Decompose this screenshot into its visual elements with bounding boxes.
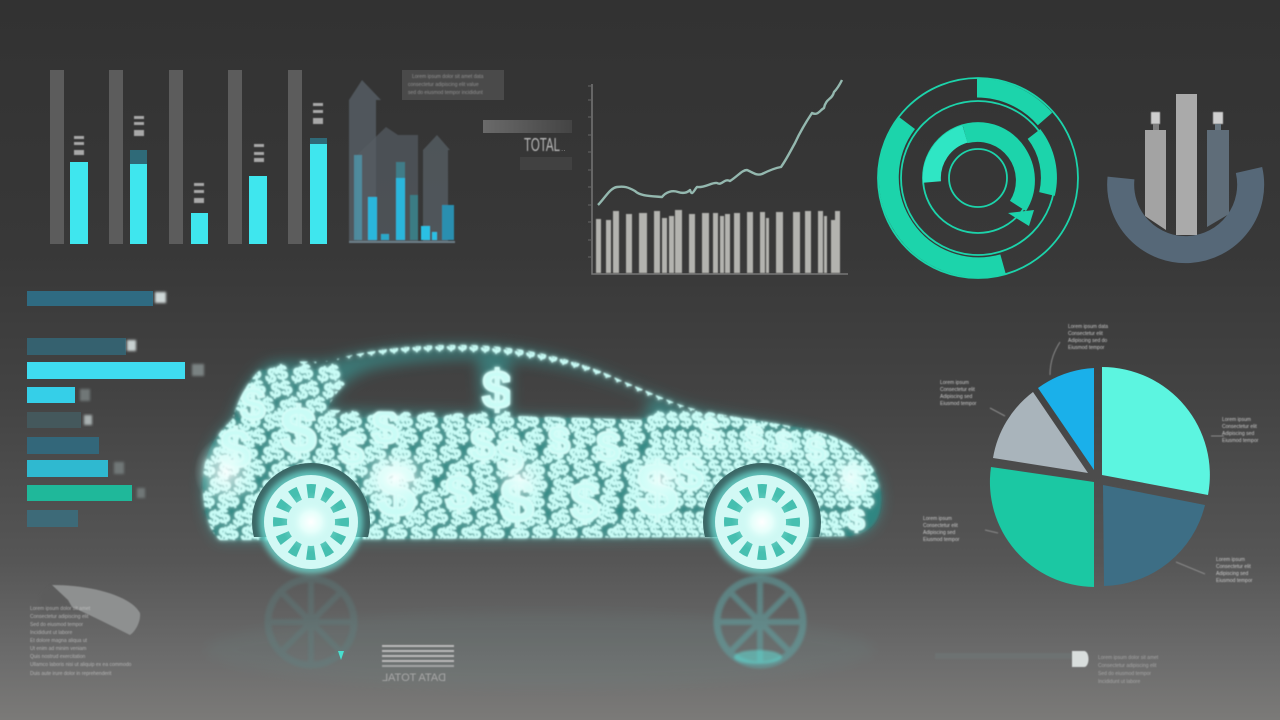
pie labels: Consectetur elit xyxy=(1068,331,1103,337)
car made of dollar signs: $ xyxy=(220,417,251,480)
pie labels: Adipiscing sed xyxy=(923,530,955,536)
car made of dollar signs: $$$$$$$$$$$$$$$$$$$$$$$$$$$$$$$$$$$$$$$$$$$$$$$$$$$$$ xyxy=(200,422,880,453)
bottom left pie slice and notes: Incididunt ut labore xyxy=(30,630,72,636)
car made of dollar signs: $$$$$$$$$ xyxy=(226,376,349,405)
bottom right slider and note: Sed do eiusmod tempor xyxy=(1098,671,1151,677)
car made of dollar signs: $ xyxy=(482,360,512,420)
bottom left pie slice and notes: Ullamco laboris nisi ut aliquip ex ea commodo xyxy=(30,662,132,668)
pie labels: Lorem ipsum data xyxy=(1068,324,1108,330)
total label: .. xyxy=(561,144,565,153)
car made of dollar signs: $ xyxy=(636,448,678,533)
bottom left pie slice and notes: Lorem ipsum dolor sit amet xyxy=(30,606,91,612)
car made of dollar signs: $ xyxy=(376,452,416,532)
caption box: sed do eiusmod tempor incididunt xyxy=(408,90,483,96)
car made of dollar signs: $ xyxy=(280,393,317,467)
pie labels: Eiusmod tempor xyxy=(940,401,977,407)
pie labels: Lorem ipsum xyxy=(1222,417,1251,423)
pie labels xyxy=(923,324,1259,584)
bottom left pie slice and notes xyxy=(30,585,140,677)
pie labels: Adipiscing sed xyxy=(1222,431,1254,437)
car made of dollar signs: $$$$$$$$$$$$$$$$$$$$$$$$$$$$$$$$$$$$$$$$$$$$$$$$$$$ xyxy=(211,407,860,438)
rear wheel xyxy=(703,463,821,581)
horizontal bar chart xyxy=(27,291,204,527)
bottom right slider and note: Incididunt ut labore xyxy=(1098,679,1140,685)
pie labels: Consectetur elit xyxy=(1222,424,1257,430)
car made of dollar signs: $ xyxy=(445,465,473,521)
caption box: Lorem ipsum dolor sit amet data xyxy=(412,74,484,80)
car made of dollar signs: $$$$$$$$$$$$$$$$$$$$$$$$$$$$$$$$$$$$$$$$$$$$$$$$$$$$$ xyxy=(202,520,848,549)
car made of dollar signs xyxy=(195,338,887,578)
car made of dollar signs: $ xyxy=(500,467,534,536)
bottom right slider and note: Lorem ipsum dolor sit amet xyxy=(1098,655,1159,661)
pie labels: Lorem ipsum xyxy=(940,380,969,386)
total label: TOTAL xyxy=(524,135,560,155)
pie labels: Eiusmod tempor xyxy=(923,537,960,543)
car made of dollar signs: $ xyxy=(340,426,364,475)
car made of dollar signs: $ xyxy=(806,429,826,470)
radial gauge xyxy=(878,78,1078,278)
car made of dollar signs: $ xyxy=(570,472,600,532)
bottom centre note: DATA TOTAL xyxy=(382,672,446,684)
pie labels: Lorem ipsum xyxy=(923,516,952,522)
pie labels: Adipiscing sed xyxy=(940,394,972,400)
pie labels: Eiusmod tempor xyxy=(1068,345,1105,351)
car made of dollar signs: $$$$$$$$$ xyxy=(223,392,344,421)
car made of dollar signs: $ xyxy=(775,426,792,459)
caption box xyxy=(402,70,504,100)
pie labels: Lorem ipsum xyxy=(1216,557,1245,563)
car made of dollar signs: $ xyxy=(848,504,865,537)
pie labels: Adipiscing sed xyxy=(1216,571,1248,577)
car made of dollar signs: $ xyxy=(596,423,620,472)
bottom left pie slice and notes: Et dolore magna aliqua ut xyxy=(30,638,88,644)
bottom right slider and note: Consectetur adipiscing elit xyxy=(1098,663,1157,669)
car made of dollar signs: $ xyxy=(676,445,704,501)
total label xyxy=(483,120,572,170)
bottom left pie slice and notes: Consectetur adipiscing elit xyxy=(30,614,89,620)
car made of dollar signs: $$$$$$$$$$$$$$$$$$$$$$$$$$$$$$$$$$$$$$$$$$$$$$$$$$$$$ xyxy=(207,470,881,502)
pie labels: Eiusmod tempor xyxy=(1222,438,1259,444)
pie labels: Consectetur elit xyxy=(940,387,975,393)
vertical bar chart xyxy=(50,70,327,244)
bottom left pie slice and notes: Duis aute irure dolor in reprehenderit xyxy=(30,671,112,677)
front wheel xyxy=(252,463,370,581)
car made of dollar signs: $$$$$$$$$$$$$$$$$$$$$$$$$$$$$$$$$$$$$$$$$$$$$$$$$$$$$ xyxy=(207,504,855,533)
pie labels: Eiusmod tempor xyxy=(1216,578,1253,584)
car made of dollar signs: $$$$$$$$$$$$$$$$$$$$$$$$$$$$$$$$$$$$$$$$$$$$$$$$$$$$$ xyxy=(200,486,877,518)
bottom centre note xyxy=(382,645,454,684)
car made of dollar signs: $$$$$$$$$$$$$$$$$$$$$$$$$$$$$$$$$$$$$$$$$$$$$$$$$$$$$ xyxy=(208,439,883,470)
car made of dollar signs: $$$$$$$$ xyxy=(237,360,344,389)
car made of dollar signs: $ xyxy=(548,419,570,463)
building and arc icon xyxy=(1121,94,1251,250)
arrow bar chart xyxy=(349,80,455,243)
car reflection xyxy=(205,579,875,688)
bottom right slider and note xyxy=(935,651,1159,685)
bottom left pie slice and notes: Quis nostrud exercitation xyxy=(30,654,86,660)
car made of dollar signs: $ xyxy=(372,402,399,455)
car made of dollar signs: $ xyxy=(240,378,266,430)
bottom left pie slice and notes: Ut enim ad minim veniam xyxy=(30,646,86,652)
car made of dollar signs: $ xyxy=(700,412,720,453)
caption box: consectetur adipiscing elit value xyxy=(408,82,479,88)
pie labels: Adipiscing sed do xyxy=(1068,338,1107,344)
line and column chart xyxy=(588,80,848,274)
pie chart xyxy=(990,367,1210,587)
car made of dollar signs: $ xyxy=(842,457,866,506)
bottom left pie slice and notes: Sed do eiusmod tempor xyxy=(30,622,83,628)
car made of dollar signs: $$$$$$$$$$$$$$$$$$$$$$$$$$$$$$$$$$$$$$$$$$$$$$$$$$$$$ xyxy=(201,454,877,486)
pie labels: Consectetur elit xyxy=(1216,564,1251,570)
pie labels: Consectetur elit xyxy=(923,523,958,529)
car made of dollar signs: $ xyxy=(745,420,764,458)
car made of dollar signs: $ xyxy=(497,430,524,483)
car made of dollar signs: $ xyxy=(470,418,496,470)
